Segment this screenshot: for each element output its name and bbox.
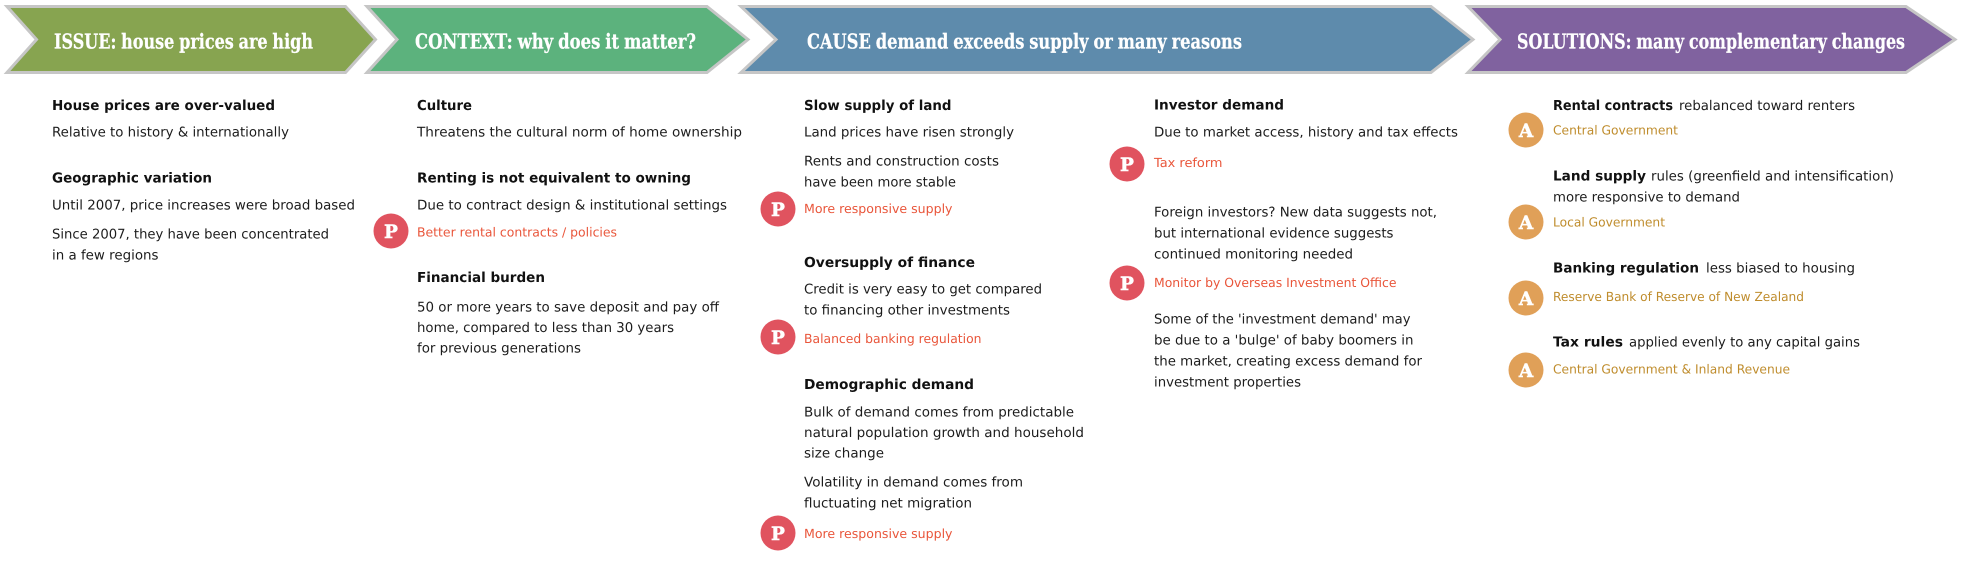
icon: A badge: A [1518,289,1534,310]
text: volatility: fluctuating net migration [804,496,972,512]
text: foreign investors: but international evidence suggests [1154,226,1394,242]
solution: banking regulation: less biased to housing [1706,262,1855,276]
text: rents: have been more stable [804,176,956,190]
icon: P badge: P [384,222,398,243]
solution: land supply: Local Government [1553,214,1665,230]
icon: A badge: A [1518,213,1534,234]
solution: rental contracts [1508,98,1855,148]
arrow: cause [741,6,1473,72]
policy: more responsive supply [760,516,953,550]
icon: P badge [760,516,796,550]
arrow: context [367,6,748,72]
solution: rental contracts: Rental contracts [1553,98,1673,114]
policy: tax reform [1110,146,1222,182]
text: foreign investors: continued monitoring needed [1154,248,1353,262]
text: volatility [804,476,1023,512]
text: baby boomers [1154,312,1422,390]
solution: land supply: more responsive to demand [1553,190,1740,206]
icon: P badge [760,192,796,226]
solution: rental contracts: rebalanced toward renters [1679,99,1855,114]
text: bulk of demand [804,406,1084,462]
arrow: cause: CAUSE demand exceeds supply or many reasons [807,30,1242,54]
arrow: issue [7,6,376,72]
solution: tax rules: applied evenly to any capital gains [1629,336,1860,350]
text: foreign investors: Foreign investors? New data suggests not, [1154,206,1437,220]
panel: solutions [1508,98,1894,388]
text: rents [804,154,999,190]
text: credit: to financing other investments [804,304,1010,318]
policy: better rental contracts [374,214,617,248]
panel: cause column one [760,98,1084,550]
text: 50 or more years [417,300,720,356]
icon: P badge: P [1120,274,1134,295]
heading: oversupply of finance: Oversupply of finance [804,255,975,271]
icon: A badge [1508,280,1544,316]
solution: tax rules [1508,334,1860,388]
text: bulk of demand: natural population growth and household [804,426,1084,441]
solution: tax rules: Tax rules [1553,334,1623,350]
icon: P badge [374,214,408,248]
heading: culture: Culture [417,98,472,114]
solution: land supply [1508,168,1894,240]
text: bulk of demand: size change [804,446,884,462]
solution: land supply: rules (greenfield and intensification) [1651,170,1894,184]
policy: balanced banking regulation: Balanced banking regulation [804,331,982,346]
text: 50 or more years: home, compared to less than 30 years [417,321,674,336]
icon: A badge: A [1518,361,1534,382]
policy: tax reform: Tax reform [1153,155,1222,170]
policy: more responsive supply: More responsive supply [804,201,953,216]
text: 50 or more years: 50 or more years to save deposit and pay off [417,300,720,316]
policy: more responsive supply [760,192,953,226]
arrow: issue: ISSUE: house prices are high [54,30,313,54]
icon: P badge [1110,266,1144,300]
text: baby boomers: be due to a 'bulge' of baby boomers in [1154,334,1414,348]
solution: rental contracts: Central Government [1553,122,1678,138]
solution: banking regulation [1508,260,1855,316]
text: rents: Rents and construction costs [804,154,999,170]
heading: over-valued: House prices are over-valued [52,98,275,114]
policy: monitor overseas investment [1110,266,1397,300]
heading: renting: Renting is not equivalent to owning [417,170,691,186]
text: bulk of demand: Bulk of demand comes from predictable [804,406,1074,420]
solution: banking regulation: Reserve Bank of Reserve of New Zealand [1553,289,1804,304]
text: contract design: Due to contract design & institutional settings [417,198,727,214]
panel: context [374,98,742,356]
text: credit [804,282,1042,318]
heading: investor demand: Investor demand [1154,98,1284,114]
heading: financial burden: Financial burden [417,270,545,286]
text: baby boomers: Some of the 'investment demand' may [1154,312,1411,328]
icon: P badge: P [1120,155,1134,176]
policy: better rental contracts: Better rental contracts / policies [417,224,617,240]
heading: demographic demand: Demographic demand [804,377,974,393]
solution: land supply: Land supply [1553,168,1646,184]
solution: banking regulation: Banking regulation [1553,260,1699,276]
text: relative: Relative to history & internationally [52,126,289,140]
text: foreign investors [1154,206,1437,262]
panel: cause column two [1110,98,1458,390]
text: land prices: Land prices have risen strongly [804,126,1014,140]
solution: tax rules: Central Government & Inland Revenue [1553,362,1790,376]
icon: P badge: P [771,524,785,545]
text: since 2007: Since 2007, they have been concentrated [52,228,329,242]
panel: issue [52,98,355,264]
text: credit: Credit is very easy to get compared [804,282,1042,298]
policy: balanced banking regulation [760,320,982,354]
icon: P badge: P [771,328,785,349]
text: baby boomers: investment properties [1154,376,1301,390]
heading: geographic variation: Geographic variation [52,170,212,186]
heading: slow supply of land: Slow supply of land [804,98,952,114]
text: 50 or more years: for previous generations [417,342,581,356]
policy: more responsive supply: More responsive supply [804,526,953,541]
text: market access: Due to market access, history and tax effects [1154,126,1458,140]
icon: A badge [1508,204,1544,240]
text: threatens: Threatens the cultural norm of home ownership [416,126,742,140]
arrow: context: CONTEXT: why does it matter? [415,30,696,54]
text: since 2007: in a few regions [52,248,159,264]
text: volatility: Volatility in demand comes from [804,476,1023,490]
text: since 2007 [52,228,329,264]
icon: A badge [1508,352,1544,388]
text: baby boomers: the market, creating excess demand for [1154,354,1422,370]
icon: P badge: P [771,200,785,221]
arrow: solutions [1468,6,1955,72]
icon: P badge [760,320,796,354]
icon: A badge: A [1518,121,1534,142]
icon: A badge [1508,112,1544,148]
text: until 2007: Until 2007, price increases were broad based [52,198,355,214]
policy: monitor overseas investment: Monitor by Overseas Investment Office [1154,275,1397,290]
